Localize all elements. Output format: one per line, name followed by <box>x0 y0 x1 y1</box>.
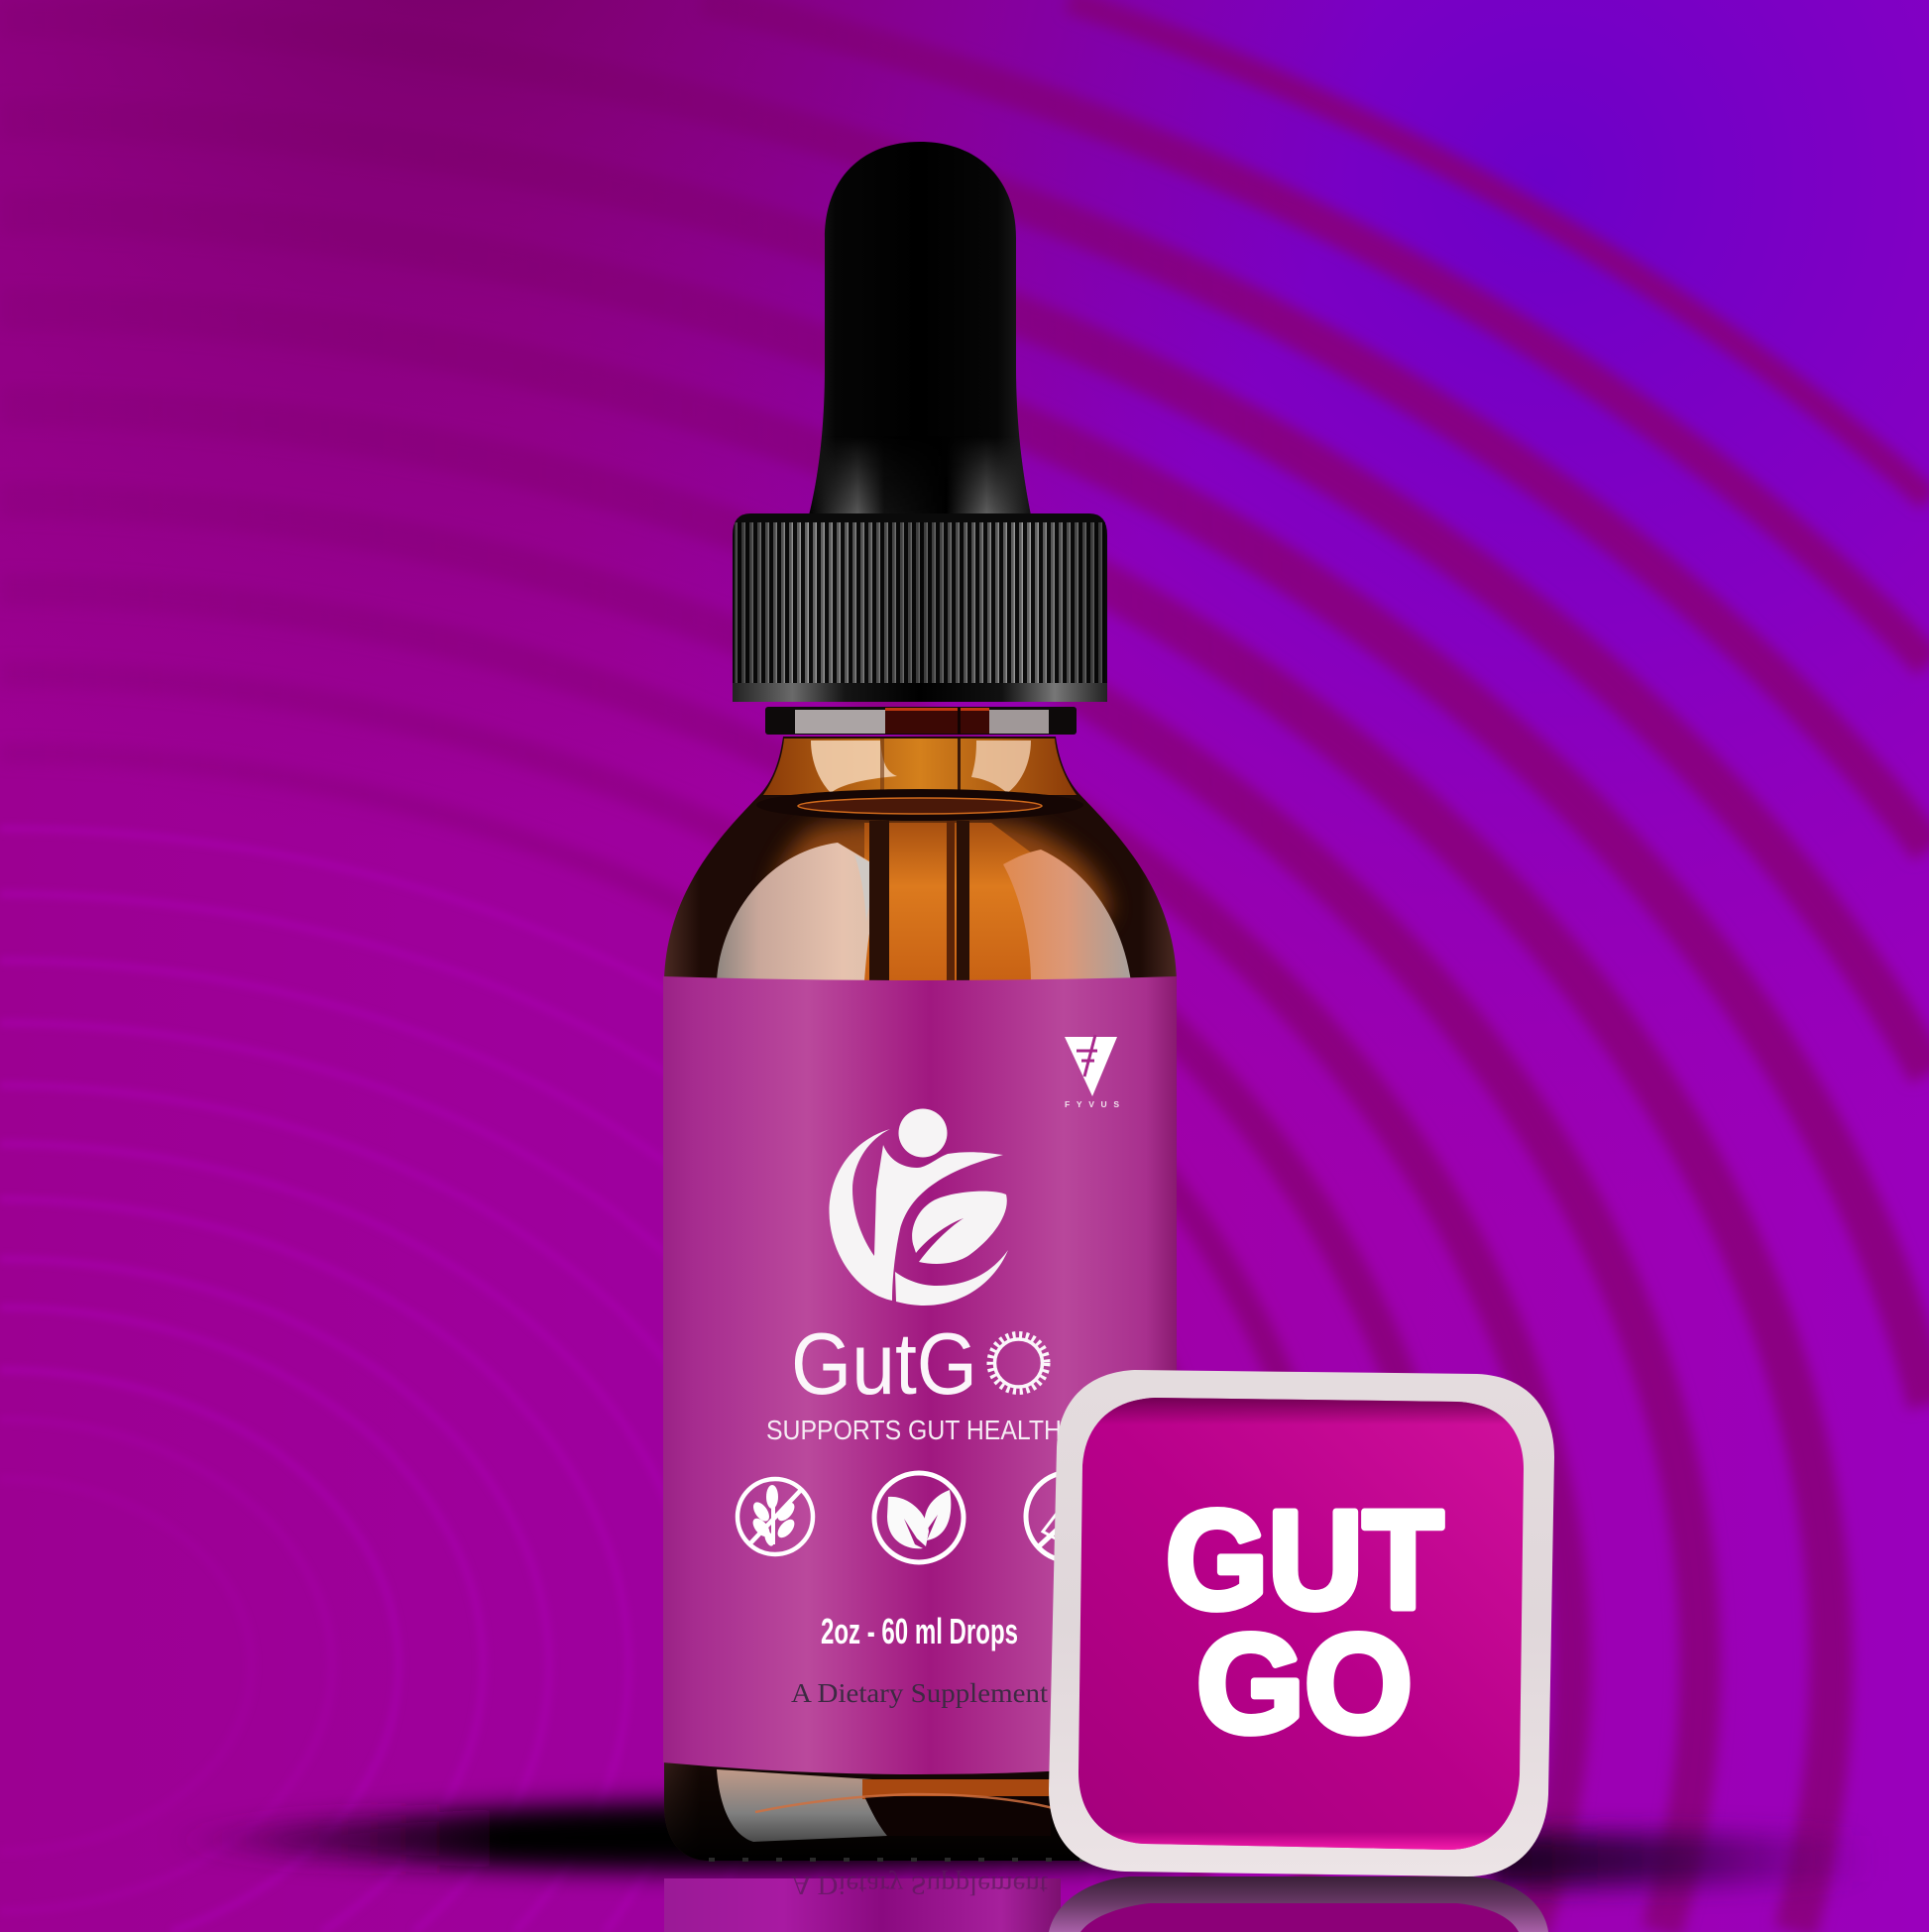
icon: third badge, partly hidden <box>1026 1472 1115 1561</box>
inner amber <box>864 823 1031 981</box>
logo: figure with leaf <box>829 1108 1008 1306</box>
badge wordmark: GUT <box>1166 1481 1443 1638</box>
warm glow under liquid line <box>773 819 1110 981</box>
amber glass body <box>664 737 1177 1861</box>
right highlight <box>1003 850 1131 981</box>
brand name: GutGO: GutG <box>791 1314 977 1413</box>
neck liquid <box>763 739 1077 795</box>
sawtooth O ring <box>991 1336 1046 1390</box>
reflected label text: A Dietary Supplement <box>791 1871 1049 1900</box>
dietary supplement text: A Dietary Supplement <box>791 1678 1049 1708</box>
left highlight <box>717 843 884 981</box>
dropper bulb <box>809 142 1031 515</box>
bottom glass <box>664 1760 1177 1861</box>
floor shadow <box>159 1800 1873 1888</box>
brand mark: FYVUS: FYVUS <box>1065 1099 1119 1109</box>
bottle reflection on floor <box>664 1871 1061 1932</box>
icon: gluten free <box>738 1479 813 1554</box>
ribbed cap <box>733 513 1107 702</box>
badge wordmark <box>1166 1481 1443 1762</box>
dropper bottle <box>663 142 1177 1861</box>
tagline: SUPPORTS GUT HEALTH <box>766 1415 1062 1445</box>
GUT GO badge <box>1049 1370 1554 1876</box>
neck collar <box>765 707 1077 735</box>
badge reflection on floor <box>1049 1876 1548 1932</box>
brand mark: FYVUS <box>1065 1035 1119 1109</box>
volume text: 2oz - 60 ml Drops <box>821 1611 1018 1651</box>
liquid surface <box>756 789 1083 821</box>
badge screen <box>1078 1398 1524 1850</box>
product label <box>663 976 1177 1774</box>
dropper tube lines <box>869 821 889 981</box>
icon: plant based <box>874 1473 964 1562</box>
badge wordmark: GO <box>1196 1605 1413 1762</box>
